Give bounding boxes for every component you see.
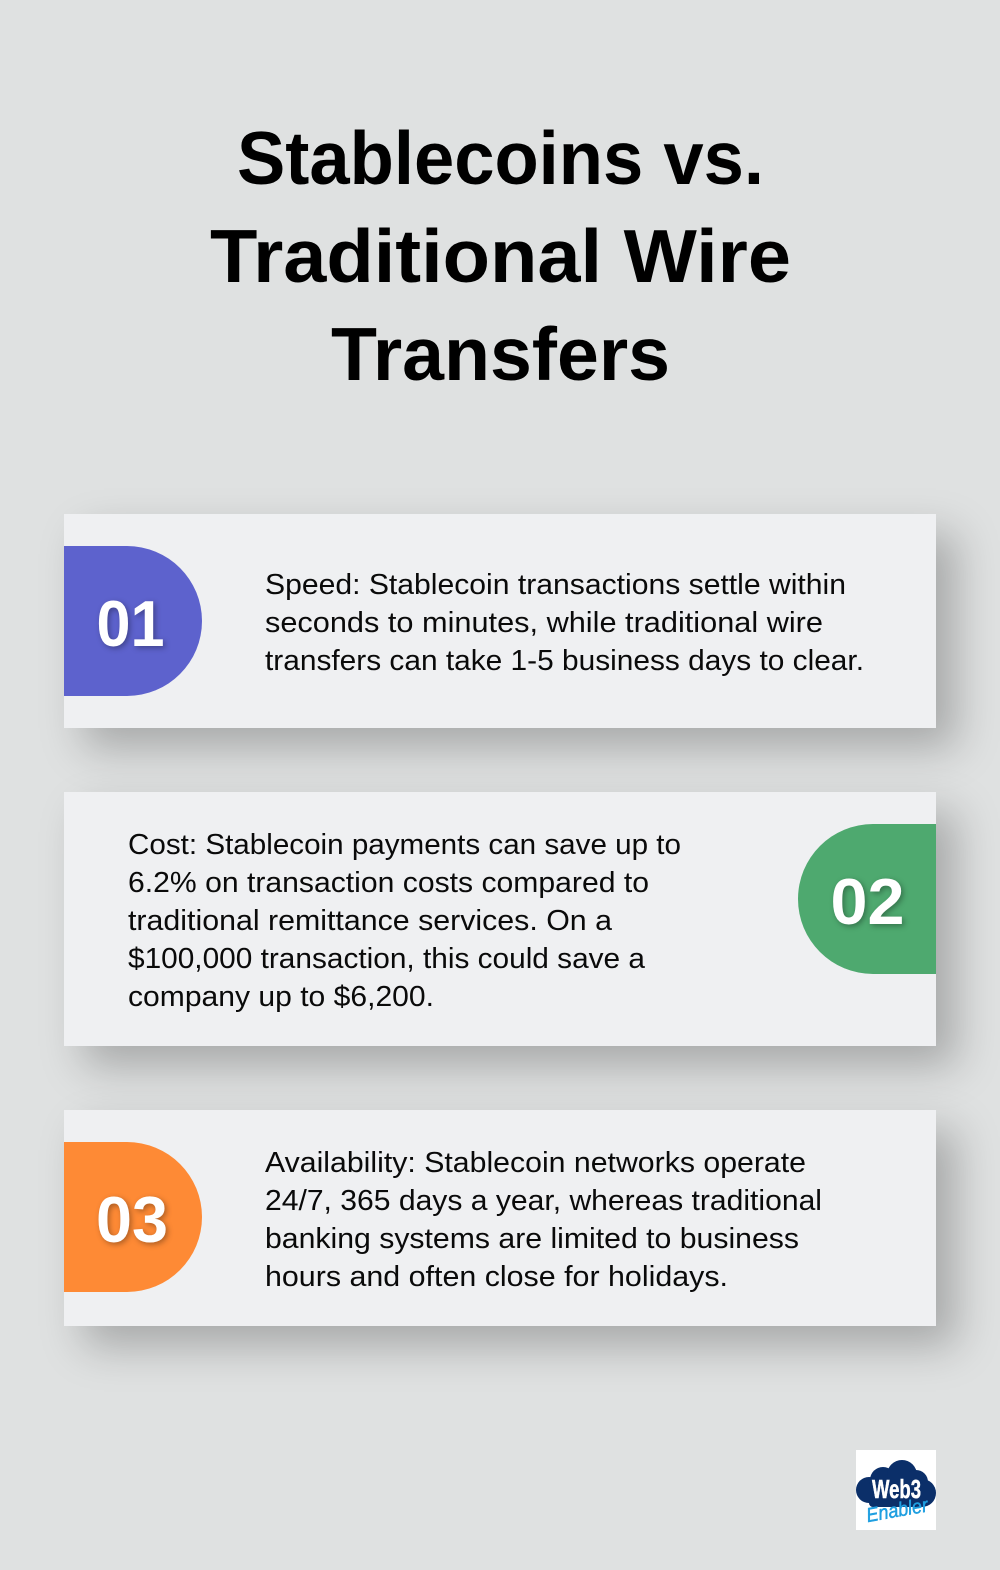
title bbox=[210, 116, 791, 396]
wordmark: Enabler: Enabler bbox=[865, 1494, 931, 1527]
text: cost comparison: $100,000 transaction, this could save a bbox=[128, 943, 646, 975]
text: availability comparison: hours and often close for holidays. bbox=[265, 1261, 728, 1293]
panel: speed bbox=[64, 514, 936, 728]
text: speed comparison: Speed: Stablecoin transactions settle within bbox=[265, 569, 846, 601]
text: availability comparison bbox=[265, 1147, 822, 1293]
panel: availability bbox=[64, 1110, 936, 1326]
icon: cloud bbox=[856, 1460, 936, 1507]
text: availability comparison: banking systems are limited to business bbox=[265, 1223, 799, 1255]
badge: 01 bbox=[64, 546, 202, 696]
badge: 03 bbox=[64, 1142, 202, 1292]
badge: 03: 03 bbox=[96, 1183, 168, 1256]
title: Stablecoins vs. bbox=[237, 116, 764, 200]
title: Transfers bbox=[331, 312, 670, 396]
logo: Web3 Enabler bbox=[856, 1450, 936, 1530]
wordmark: Web3: Web3 bbox=[872, 1474, 921, 1504]
badge: 02 bbox=[798, 824, 936, 974]
badge: 02: 02 bbox=[830, 865, 904, 938]
text: cost comparison: Cost: Stablecoin payments can save up to bbox=[128, 829, 681, 861]
text: cost comparison: company up to $6,200. bbox=[128, 981, 434, 1013]
text: cost comparison bbox=[128, 829, 681, 1013]
text: speed comparison: seconds to minutes, while traditional wire bbox=[265, 607, 823, 639]
badge: 01: 01 bbox=[96, 587, 164, 660]
text: cost comparison: traditional remittance services. On a bbox=[128, 905, 613, 937]
text: availability comparison: 24/7, 365 days a year, whereas traditional bbox=[265, 1185, 822, 1217]
text: cost comparison: 6.2% on transaction costs compared to bbox=[128, 867, 649, 899]
text: availability comparison: Availability: Stablecoin networks operate bbox=[265, 1147, 806, 1179]
title: Traditional Wire bbox=[210, 214, 791, 298]
panel: cost bbox=[64, 792, 936, 1046]
text: speed comparison: transfers can take 1-5 business days to clear. bbox=[265, 645, 864, 677]
text: speed comparison bbox=[265, 569, 864, 677]
